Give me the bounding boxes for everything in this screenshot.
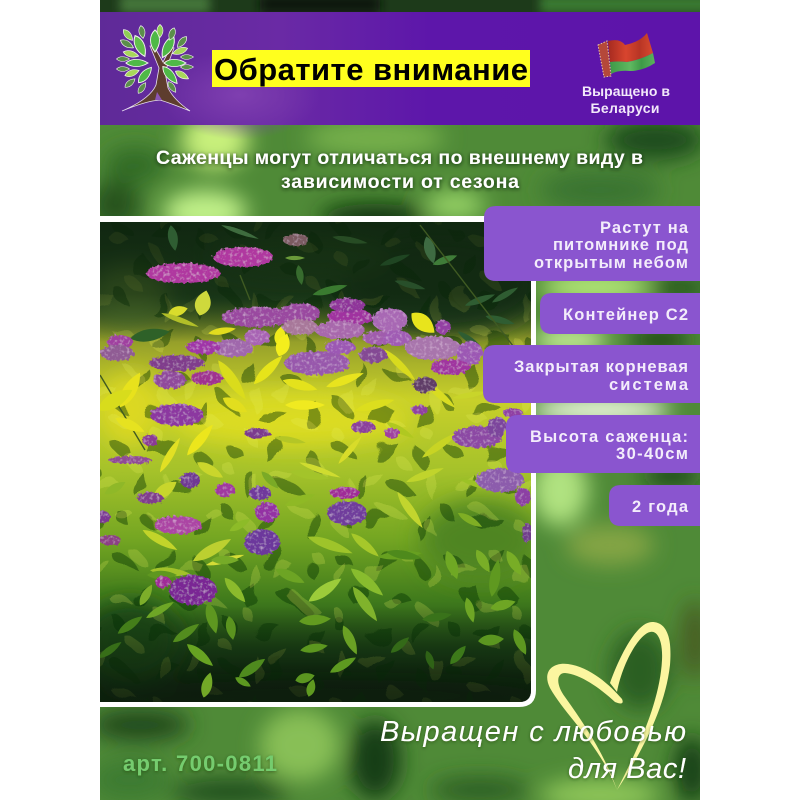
mottled foliage texture (100, 222, 531, 702)
caption: grown in Belarus (582, 83, 670, 116)
icon: Belarus flag (598, 33, 655, 77)
subtitle: seedlings may differ: зависимости от сезона (281, 171, 519, 193)
caption: grown in Belarus: Выращено в (582, 83, 670, 99)
info pill: seedling height (506, 415, 700, 473)
info pill: seedling height: Высота саженца: (530, 428, 688, 446)
info pill: grown outdoors (484, 206, 700, 281)
subtitle: seedlings may differ (156, 147, 643, 193)
slogan: grown with love (380, 716, 686, 785)
info pill: age: 2 года (632, 498, 689, 516)
heading: attention: Обратите внимание (214, 52, 528, 87)
stems (100, 225, 520, 450)
subtitle: seedlings may differ: Саженцы могут отличаться по внешнему виду в (156, 147, 643, 169)
top dark strip (100, 0, 700, 12)
slogan: grown with love: Выращен с любовью (380, 716, 686, 748)
info pill: grown outdoors: питомнике под (553, 236, 689, 254)
lime mid leaves (103, 458, 500, 578)
flower clusters (96, 234, 532, 605)
info pill: age (609, 485, 700, 526)
info pill: grown outdoors: открытым небом (534, 254, 688, 272)
header band (100, 12, 700, 140)
page background: blurred green bokeh (100, 125, 700, 800)
info pill: closed root system (483, 345, 700, 403)
infographic canvas (100, 0, 700, 800)
info pill: container C2 (540, 293, 700, 334)
photo: flowering spirea shrub (100, 216, 536, 707)
icon: tree logo (116, 24, 194, 111)
dark upper foliage (129, 223, 519, 351)
photo frame (100, 216, 536, 707)
info pill: closed root system: система (609, 376, 689, 394)
info pill: seedling height: 30-40см (616, 445, 688, 463)
article number: арт. 700-0811 (123, 751, 277, 776)
yellow leaves (94, 288, 488, 474)
info pill: closed root system: Закрытая корневая (514, 358, 688, 376)
info pill: container C2: Контейнер С2 (563, 306, 688, 324)
slogan: grown with love: для Вас! (568, 753, 686, 785)
info pill: grown outdoors: Растут на (600, 219, 689, 237)
green lower leaves (96, 547, 530, 699)
caption: grown in Belarus: Беларуси (590, 100, 660, 116)
icon: yellow heart (547, 622, 670, 790)
